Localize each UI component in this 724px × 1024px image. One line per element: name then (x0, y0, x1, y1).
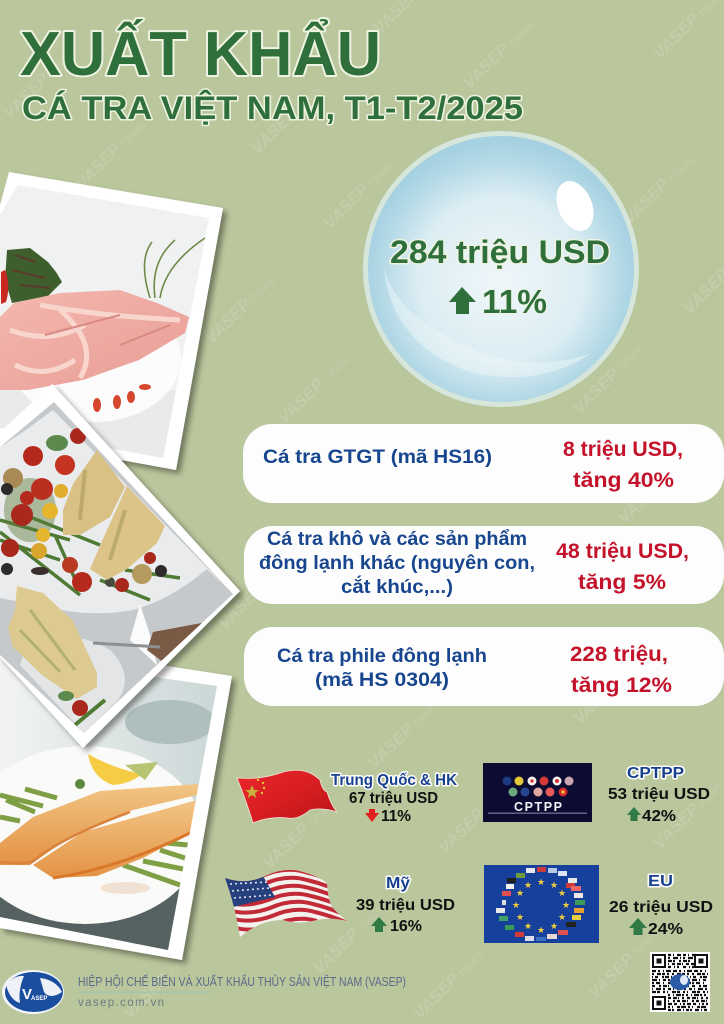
icon: US flag (225, 870, 348, 937)
EU flags ring: ★ (516, 912, 524, 922)
watermark pattern: VASEP news (319, 155, 397, 233)
watermark pattern: VASEP news (584, 925, 662, 1003)
icon: up arrow (371, 917, 387, 932)
panel: dried and other frozen pangasius: 48 triệu USD, (556, 540, 689, 563)
EU flags ring: ★ (562, 900, 570, 910)
watermark pattern: VASEP news (247, 80, 325, 158)
EU flags ring: ★ (558, 912, 566, 922)
photo: grilled fillet on asparagus (0, 640, 232, 960)
watermark pattern: VASEP news (71, 115, 149, 193)
total value: 284 triệu USD (390, 234, 610, 270)
watermark pattern: VASEP news (569, 340, 647, 418)
VASEP logo (2, 970, 64, 1014)
VASEP logo: V (22, 986, 32, 1003)
total growth: 11% (482, 283, 547, 320)
panel: frozen fillet: Cá tra phile đông lạnh (277, 646, 487, 667)
market: China and Hong Kong: Trung Quốc & HK (331, 772, 457, 789)
market: United States: 39 triệu USD (356, 897, 455, 914)
watermark pattern: VASEP news (119, 945, 197, 1023)
EU flags ring: ★ (512, 900, 520, 910)
market: China and Hong Kong (237, 770, 457, 825)
EU flags ring: ★ (550, 880, 558, 890)
watermark pattern: VASEP news (274, 350, 352, 428)
icon: down arrow (365, 809, 379, 822)
footer (2, 952, 710, 1014)
panel: dried and other frozen pangasius: Cá tra khô và các sản phẩm (267, 529, 527, 550)
CPTPP logo (483, 763, 592, 822)
market: CPTPP: 42% (642, 808, 676, 825)
icon: up arrow (449, 287, 476, 314)
market: EU: 24% (648, 921, 683, 938)
VASEP logo: ASEP (31, 996, 47, 1002)
bubble highlight (549, 176, 601, 236)
market: CPTPP (483, 763, 710, 825)
subtitle: CÁ TRA VIỆT NAM, T1-T2/2025 (22, 90, 523, 126)
market: EU (484, 865, 713, 943)
icon: up arrow (629, 918, 647, 935)
market: CPTPP: 53 triệu USD (608, 786, 710, 803)
EU flags ring: ★ (558, 888, 566, 898)
website: vasep.com.vn (78, 997, 164, 1009)
panel: dried and other frozen pangasius: tăng 5% (578, 571, 666, 594)
market: United States: Mỹ (386, 875, 410, 892)
panel: frozen fillet: tăng 12% (571, 674, 672, 697)
market: EU: EU (648, 873, 673, 890)
panel: frozen fillet: 228 triệu, (570, 643, 668, 666)
photo: raw fish fillet on plate (0, 170, 225, 470)
watermark pattern: VASEP news (619, 150, 697, 228)
panel: value added pangasius: Cá tra GTGT (mã HS16) (263, 447, 492, 468)
market: China and Hong Kong: 11% (381, 808, 411, 825)
panel: frozen fillet: (mã HS 0304) (315, 670, 449, 691)
EU flags ring: ★ (524, 921, 532, 931)
association name: HIỆP HỘI CHẾ BIẾN VÀ XUẤT KHẨU THỦY SẢN VIỆT NAM (VASEP) (78, 974, 406, 989)
EU flags ring: ★ (537, 925, 545, 935)
panel: value added pangasius (243, 424, 724, 503)
watermark pattern: VASEP news (569, 650, 647, 728)
panel: value added pangasius: tăng 40% (573, 469, 674, 492)
market: China and Hong Kong: 67 triệu USD (349, 790, 438, 807)
panel: value added pangasius: 8 triệu USD, (563, 438, 683, 461)
icon: China flag (237, 770, 337, 823)
EU flags ring: ★ (537, 877, 545, 887)
watermark pattern: VASEP news (309, 900, 387, 978)
watermark pattern: VASEP news (364, 695, 442, 773)
market: United States: 16% (390, 918, 422, 935)
title (20, 20, 523, 126)
watermark pattern: VASEP news (214, 555, 292, 633)
QR code (650, 952, 710, 1012)
EU flags ring: ★ (516, 888, 524, 898)
panel: dried and other frozen pangasius: đông lạnh khác (nguyên con, (259, 553, 535, 574)
EU flags ring: ★ (550, 921, 558, 931)
market: United States (225, 870, 454, 937)
market: EU: 26 triệu USD (609, 899, 713, 916)
EU flags ring: ★ (524, 880, 532, 890)
photo: fish with tomato salad (0, 384, 240, 748)
panel: dried and other frozen pangasius (244, 526, 724, 604)
watermark pattern: VASEP news (434, 780, 512, 858)
watermark pattern: VASEP news (409, 945, 487, 1023)
watermark pattern: VASEP news (614, 450, 692, 528)
title: XUẤT KHẨU (20, 20, 381, 89)
market: CPTPP: CPTPP (627, 765, 684, 782)
watermark pattern: VASEP news (201, 270, 279, 348)
watermark pattern: VASEP news (459, 15, 537, 93)
panel: frozen fillet (244, 627, 724, 706)
icon: up arrow (627, 807, 641, 821)
watermark pattern: VASEP news (259, 795, 337, 873)
watermark pattern: VASEP news (0, 45, 77, 123)
EU flags ring (484, 865, 599, 943)
panel: dried and other frozen pangasius: cắt khúc,...) (341, 576, 453, 598)
CPTPP logo: CPTPP (514, 800, 562, 814)
bubble reflection (384, 268, 592, 377)
total value bubble (363, 131, 639, 407)
